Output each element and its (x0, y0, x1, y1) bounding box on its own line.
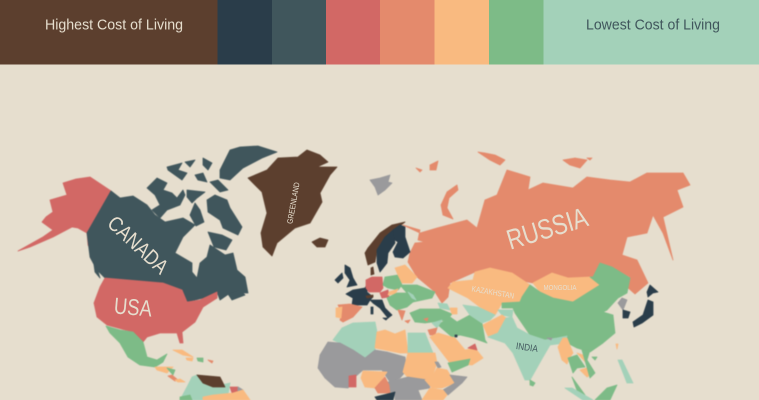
label: Russia: RUSSIA (503, 201, 592, 255)
label: Mongolia: MONGOLIA (544, 283, 576, 292)
legend label: lowest: Lowest Cost of Living (586, 18, 720, 34)
China (513, 263, 630, 352)
Greenland and Iceland (248, 150, 337, 256)
Russia (403, 152, 690, 303)
Middle East (405, 303, 487, 372)
Southeast Asia (530, 338, 633, 400)
label: Kazakhstan: KAZAKHSTAN (471, 284, 515, 301)
India (488, 317, 567, 380)
USA (94, 278, 217, 343)
Africa (318, 322, 467, 400)
label: Canada: CANADA (103, 212, 173, 279)
legend: cost of living colour scale (0, 0, 759, 64)
Korea and Japan (618, 285, 658, 327)
Svalbard (370, 175, 392, 195)
label: USA: USA (113, 292, 154, 322)
legend label: highest: Highest Cost of Living (45, 18, 183, 34)
label: Greenland: GREENLAND (285, 181, 302, 225)
Canada (87, 146, 277, 302)
world map (18, 146, 690, 400)
Alaska (18, 177, 111, 258)
Europe (335, 222, 435, 322)
Central Asia (448, 268, 600, 336)
South America (180, 375, 250, 400)
Mexico and Central America (106, 326, 213, 382)
label: India: INDIA (515, 341, 539, 355)
